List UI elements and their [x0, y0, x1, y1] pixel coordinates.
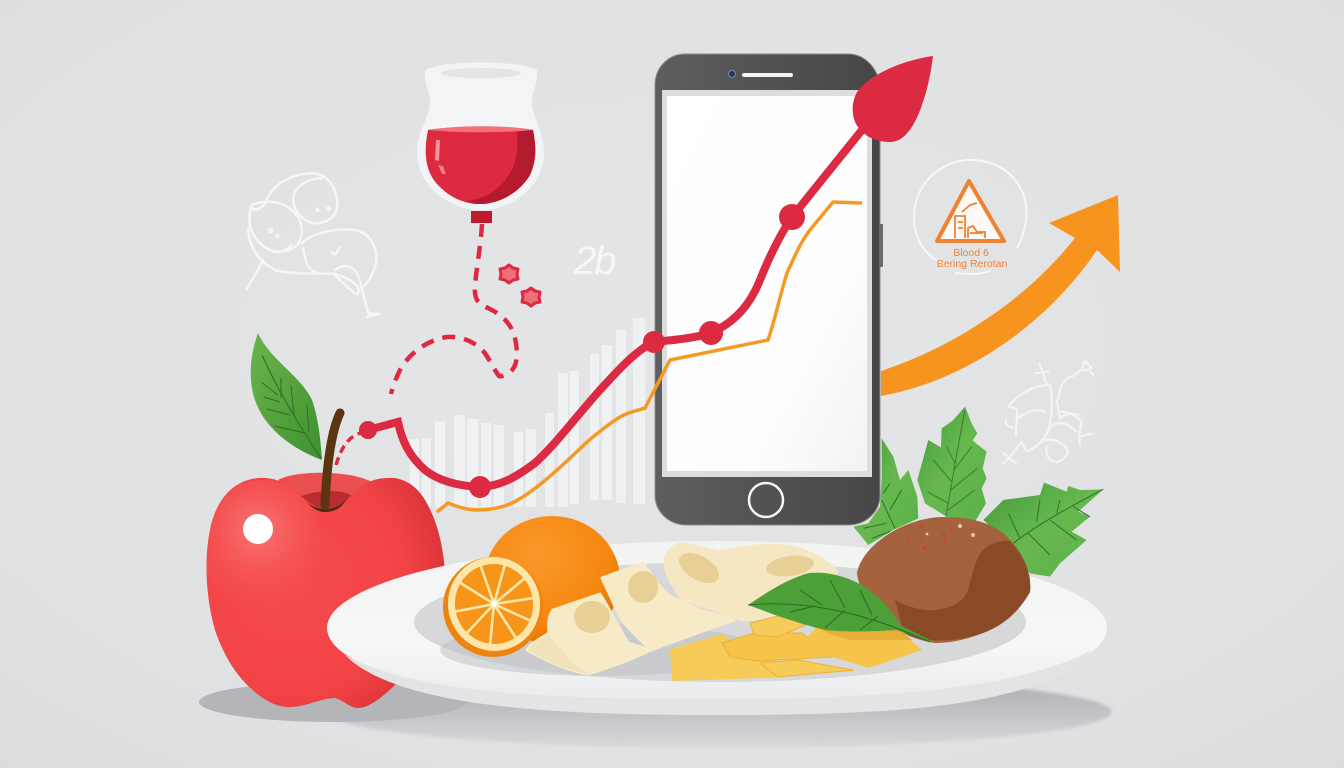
connector: [471, 211, 492, 223]
phone: [655, 54, 883, 525]
plate: [327, 541, 1107, 715]
blood cells: [500, 265, 540, 306]
bread 3: [665, 544, 837, 620]
home button: [749, 483, 783, 517]
dimple: [296, 491, 352, 510]
back leaves: [853, 407, 1103, 577]
bread 1: [527, 594, 651, 674]
apple: [202, 333, 445, 708]
red trend line: [359, 56, 933, 498]
badge ring: [914, 160, 1026, 274]
screen: [667, 96, 867, 471]
data points: [359, 421, 377, 439]
plate edge highlight: [345, 650, 1092, 715]
plate well: [414, 562, 1026, 682]
warning badge: Bering Rerotan: [937, 258, 1007, 270]
bread 2: [602, 563, 734, 650]
centre leaf: [917, 407, 987, 522]
arrow head: [853, 56, 933, 142]
orange slice: [434, 548, 552, 666]
badge text: Blood 6: [953, 247, 989, 259]
yellow chips: [671, 615, 922, 680]
brown bun: [857, 517, 1030, 643]
food shadow: [440, 624, 760, 676]
wine: [426, 127, 535, 204]
warning triangle: [937, 181, 1004, 241]
dashed link from stem: [336, 432, 364, 465]
whole orange: [484, 516, 620, 644]
bun seeds: [907, 524, 975, 550]
label: 2b: 2b: [573, 239, 616, 283]
flatbread slices: [527, 544, 837, 674]
camera: [728, 70, 736, 78]
right leaf: [983, 483, 1103, 577]
warning badge: [914, 160, 1026, 274]
triangle pictogram: [955, 203, 985, 238]
phone body: [655, 54, 880, 525]
orange arrow: [881, 195, 1120, 396]
chart: background bars: [410, 318, 645, 507]
highlight: [243, 514, 273, 544]
glass body: [417, 62, 544, 210]
apple body: [206, 478, 445, 708]
side button: [880, 224, 883, 267]
doodle: white line sketch of figures: [247, 173, 380, 317]
plate leaf: [748, 573, 936, 643]
apple leaf: [251, 333, 322, 460]
stem: [325, 413, 340, 505]
screen frame: [662, 90, 872, 477]
glass rim: [441, 68, 521, 78]
wine glass with blood: [417, 62, 544, 223]
segment membranes: [453, 564, 534, 645]
plate rim: [327, 541, 1107, 715]
orange line series: [437, 202, 862, 512]
apple back: [278, 473, 372, 510]
left leaf: [853, 438, 918, 545]
doodle: white scribble on the right: [1003, 361, 1093, 464]
apple sheen: [206, 480, 309, 580]
shadows under plate and apple: [199, 676, 1112, 748]
bun shadow side: [895, 541, 1030, 641]
speaker: [742, 73, 793, 77]
dashed tube: [391, 224, 517, 394]
dimple shadow: [305, 497, 348, 512]
